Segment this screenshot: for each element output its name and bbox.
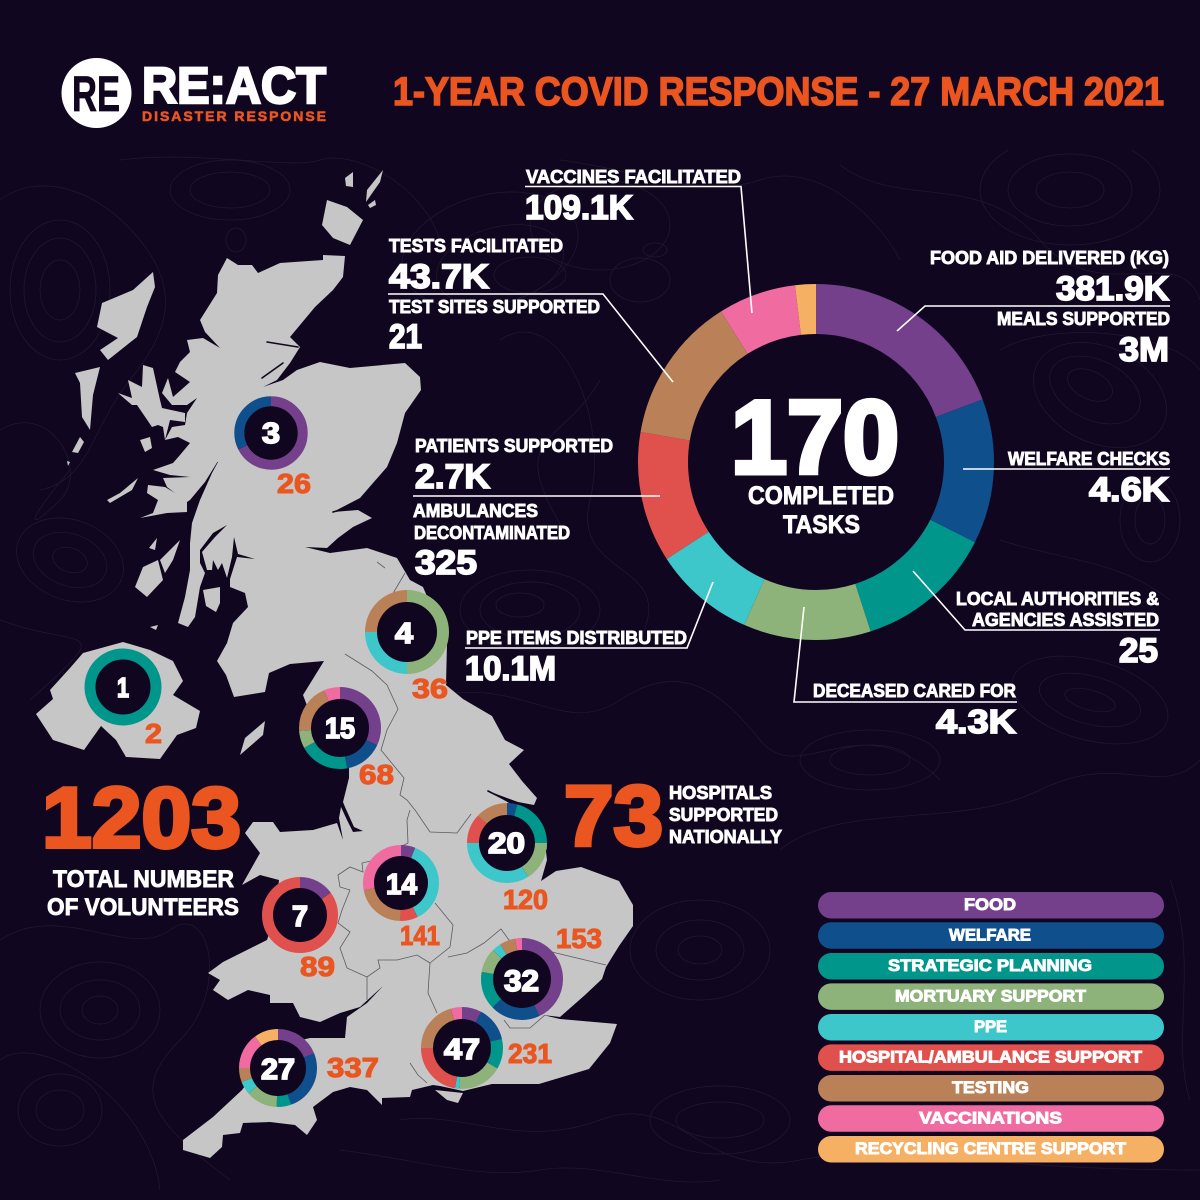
callout: vaccines <box>525 167 752 313</box>
region: North East <box>371 596 448 704</box>
donut: Scotland 3 tasks: 3 <box>262 418 280 450</box>
donut: North West 15 tasks: 15 <box>325 713 355 745</box>
volunteers: West Midlands 141: 141 <box>400 920 440 951</box>
region: Wales <box>263 878 337 982</box>
region: Scotland <box>235 397 311 499</box>
callout: patients and ambulances: 2.7K <box>415 458 490 496</box>
legend: recycling centre support: RECYCLING CENTRE SUPPORT <box>855 1140 1126 1158</box>
callout: local authorities: LOCAL AUTHORITIES & <box>956 589 1159 609</box>
hospitals number: 73 <box>564 769 663 864</box>
leader line <box>525 186 752 313</box>
volunteers: North West 68: 68 <box>359 759 394 790</box>
legend: food: FOOD <box>964 896 1016 914</box>
volunteers: South East 231: 231 <box>508 1038 552 1069</box>
callout: food and meals: 3M <box>1119 331 1169 369</box>
legend: recycling centre support <box>818 1136 1164 1162</box>
region: East Midlands <box>468 804 548 915</box>
landmass: Isle of Man <box>240 721 265 755</box>
volunteers: Northern Ireland 2: 2 <box>145 718 162 749</box>
callout: patients and ambulances: AMBULANCES <box>413 501 538 521</box>
leader line <box>794 607 1017 702</box>
donut segments <box>663 309 969 615</box>
hospitals label: SUPPORTED <box>669 805 778 825</box>
leader line <box>963 468 1170 470</box>
volunteers: Wales 89: 89 <box>300 951 335 982</box>
callout: food and meals: MEALS SUPPORTED <box>997 309 1170 329</box>
donut: East Midlands 20 tasks: 20 <box>488 828 525 860</box>
legend: strategic planning <box>818 953 1164 980</box>
callout: patients and ambulances: 325 <box>415 544 477 582</box>
landmass: Great Britain <box>153 255 633 1158</box>
callout: local authorities: 25 <box>1119 632 1158 670</box>
callout: welfare: WELFARE CHECKS <box>1008 449 1170 469</box>
callout: welfare <box>963 449 1170 509</box>
legend: testing: TESTING <box>952 1079 1029 1097</box>
total volunteers label: TOTAL NUMBER <box>53 866 234 893</box>
legend: hospital ambulance support: HOSPITAL/AMBULANCE SUPPORT <box>839 1048 1142 1066</box>
callout: deceased: 4.3K <box>936 703 1016 740</box>
legend: testing <box>818 1075 1164 1102</box>
leader line <box>465 582 713 648</box>
donut chart: completed tasks <box>663 309 969 615</box>
donut: West Midlands 14 tasks: 14 <box>386 869 417 901</box>
landmass: Scottish islands <box>67 170 383 630</box>
total volunteers label: OF VOLUNTEERS <box>47 894 239 921</box>
logo badge <box>62 58 132 128</box>
leader line <box>897 306 1170 331</box>
leader line <box>413 495 660 497</box>
volunteers: East Midlands 120: 120 <box>503 884 548 915</box>
legend: mortuary support <box>818 983 1164 1010</box>
legend: vaccinations <box>818 1105 1164 1132</box>
donut: East of England 32 tasks: 32 <box>504 965 539 998</box>
donut: Northern Ireland 1 task: 1 <box>117 672 129 703</box>
callout: welfare: 4.6K <box>1089 471 1169 509</box>
hospitals label: HOSPITALS <box>669 783 772 803</box>
region: West Midlands <box>364 846 440 951</box>
logo badge: RE <box>72 66 120 122</box>
donut: North East 4 tasks: 4 <box>395 618 413 650</box>
total volunteers number: 1203 <box>42 771 241 866</box>
callout: tests <box>388 236 673 382</box>
legend: vaccinations: VACCINATIONS <box>919 1110 1062 1128</box>
callout: tests: TEST SITES SUPPORTED <box>389 297 600 317</box>
legend: welfare <box>818 922 1164 949</box>
callout: PPE: 10.1M <box>465 650 556 688</box>
legend <box>818 892 1164 1162</box>
region: South West <box>240 1030 379 1106</box>
volunteers: South West 337: 337 <box>327 1052 379 1083</box>
region: Northern Ireland <box>85 649 162 749</box>
logo wordmark: RE:ACT <box>142 57 326 114</box>
region: East of England <box>482 923 602 1019</box>
legend: PPE: PPE <box>974 1018 1007 1036</box>
callout: deceased <box>794 607 1017 740</box>
callout: deceased: DECEASED CARED FOR <box>813 681 1016 701</box>
logo tagline: DISASTER RESPONSE <box>142 108 326 124</box>
legend: PPE <box>818 1014 1164 1040</box>
centre label: COMPLETED <box>748 482 894 510</box>
callout: PPE: PPE ITEMS DISTRIBUTED <box>466 628 687 648</box>
total volunteers label <box>47 866 239 921</box>
volunteers: Scotland 26: 26 <box>277 468 311 499</box>
region: North West <box>300 688 394 790</box>
callout: vaccines: VACCINES FACILITATED <box>526 167 741 187</box>
map of the UK <box>36 170 633 1158</box>
callout: patients and ambulances <box>413 436 660 582</box>
callout: food and meals <box>897 248 1170 369</box>
callout: tests: 21 <box>389 318 422 356</box>
donut: South West 27 tasks: 27 <box>261 1054 295 1086</box>
logo: RE:ACT Disaster Response <box>62 57 326 128</box>
callout: tests: 43.7K <box>389 258 489 296</box>
callout: local authorities <box>913 571 1160 670</box>
stat: total volunteers <box>42 771 241 921</box>
landmass: Northern Ireland <box>36 642 200 759</box>
volunteers: North East 36: 36 <box>412 673 448 704</box>
callout: food and meals: 381.9K <box>1056 270 1169 308</box>
centre label: TASKS <box>783 511 860 539</box>
volunteers: East of England 153: 153 <box>556 923 602 954</box>
centre number: 170 <box>731 380 899 496</box>
hospitals label: NATIONALLY <box>669 827 782 847</box>
callout: PPE <box>465 582 713 688</box>
hospitals label <box>669 783 782 847</box>
region: South East <box>422 1008 552 1088</box>
callout: vaccines: 109.1K <box>525 189 633 227</box>
leader line <box>388 294 673 382</box>
donut: Wales 7 tasks: 7 <box>292 901 308 933</box>
callout: local authorities: AGENCIES ASSISTED <box>972 610 1159 630</box>
landmass: Isle of Wight <box>435 1090 463 1103</box>
callout: tests: TESTS FACILITATED <box>389 236 563 256</box>
centre label <box>748 482 894 539</box>
legend: hospital ambulance support <box>818 1044 1164 1071</box>
leader line <box>913 571 1160 630</box>
callout: patients and ambulances: PATIENTS SUPPORTED <box>415 436 613 456</box>
stat: hospitals supported <box>564 769 782 864</box>
legend: welfare: WELFARE <box>949 926 1031 944</box>
donut: South East 47 tasks: 47 <box>444 1034 480 1066</box>
callout: food and meals: FOOD AID DELIVERED (KG) <box>930 248 1169 268</box>
legend: strategic planning: STRATEGIC PLANNING <box>888 957 1092 975</box>
callout: patients and ambulances: DECONTAMINATED <box>414 523 570 543</box>
legend: mortuary support: MORTUARY SUPPORT <box>895 988 1086 1006</box>
legend: food <box>818 892 1164 918</box>
